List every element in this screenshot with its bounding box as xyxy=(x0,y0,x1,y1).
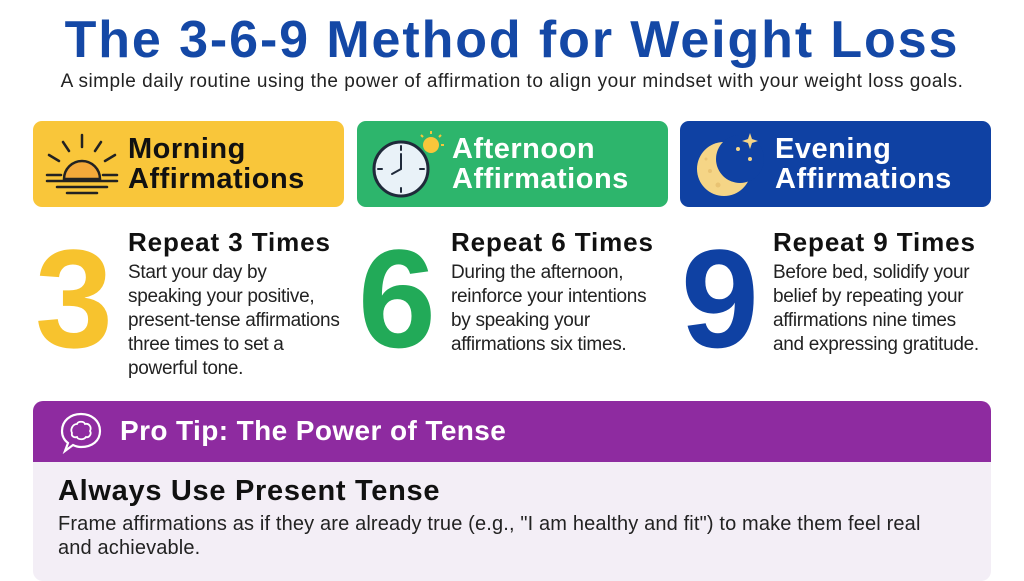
step text: evening: belief by repeating your xyxy=(773,286,963,307)
step text: morning: speaking your positive, xyxy=(128,286,314,307)
panel header: morning: Affirmations xyxy=(128,163,305,195)
tip heading: Always Use Present Tense xyxy=(58,475,440,507)
panel header: morning xyxy=(33,121,344,207)
icon: sunrise xyxy=(46,134,118,194)
icon: moon and stars xyxy=(697,133,758,196)
icon: clock with sun xyxy=(372,131,444,198)
icon: brain speech bubble xyxy=(60,412,102,454)
panel header: afternoon: Affirmations xyxy=(452,163,629,195)
panel header: evening: Affirmations xyxy=(775,163,952,195)
step text: morning: Start your day by xyxy=(128,262,267,283)
big number 3: 3 xyxy=(35,220,113,377)
tip text: Frame affirmations as if they are already true (e.g., "I am healthy and fit") to make them feel real xyxy=(58,513,921,535)
tip text: and achievable. xyxy=(58,537,200,559)
panel header: afternoon xyxy=(357,121,668,207)
step text: afternoon xyxy=(451,262,646,355)
step text: afternoon: affirmations six times. xyxy=(451,334,626,355)
step text: morning xyxy=(128,262,340,379)
step text: evening: affirmations nine times xyxy=(773,310,956,331)
step text: afternoon: reinforce your intentions xyxy=(451,286,646,307)
step text: evening xyxy=(773,262,979,355)
big number 9: 9 xyxy=(681,220,759,377)
big number 6: 6 xyxy=(358,220,436,377)
step text: afternoon: by speaking your xyxy=(451,310,590,331)
step heading: afternoon: Repeat 6 Times xyxy=(451,227,654,257)
tip text xyxy=(58,513,921,559)
panel header: morning: Morning xyxy=(128,133,246,165)
pro tip header xyxy=(33,401,991,462)
step heading: morning: Repeat 3 Times xyxy=(128,227,331,257)
panel header: evening xyxy=(680,121,991,207)
title: The 3-6-9 Method for Weight Loss xyxy=(65,11,959,69)
pro tip header: Pro Tip: The Power of Tense xyxy=(120,415,506,446)
step text: morning: present-tense affirmations xyxy=(128,310,340,331)
step text: morning: three times to set a xyxy=(128,334,284,355)
step text: afternoon: During the afternoon, xyxy=(451,262,623,283)
panel header: afternoon: Afternoon xyxy=(452,133,595,165)
panel: pro tip xyxy=(33,401,991,581)
panel header: evening: Evening xyxy=(775,133,891,165)
step text: evening: and expressing gratitude. xyxy=(773,334,979,355)
step text: morning: powerful tone. xyxy=(128,358,243,379)
subtitle: A simple daily routine using the power of affirmation to align your mindset with your weight loss goals. xyxy=(61,71,963,92)
step text: evening: Before bed, solidify your xyxy=(773,262,969,283)
step heading: evening: Repeat 9 Times xyxy=(773,227,976,257)
